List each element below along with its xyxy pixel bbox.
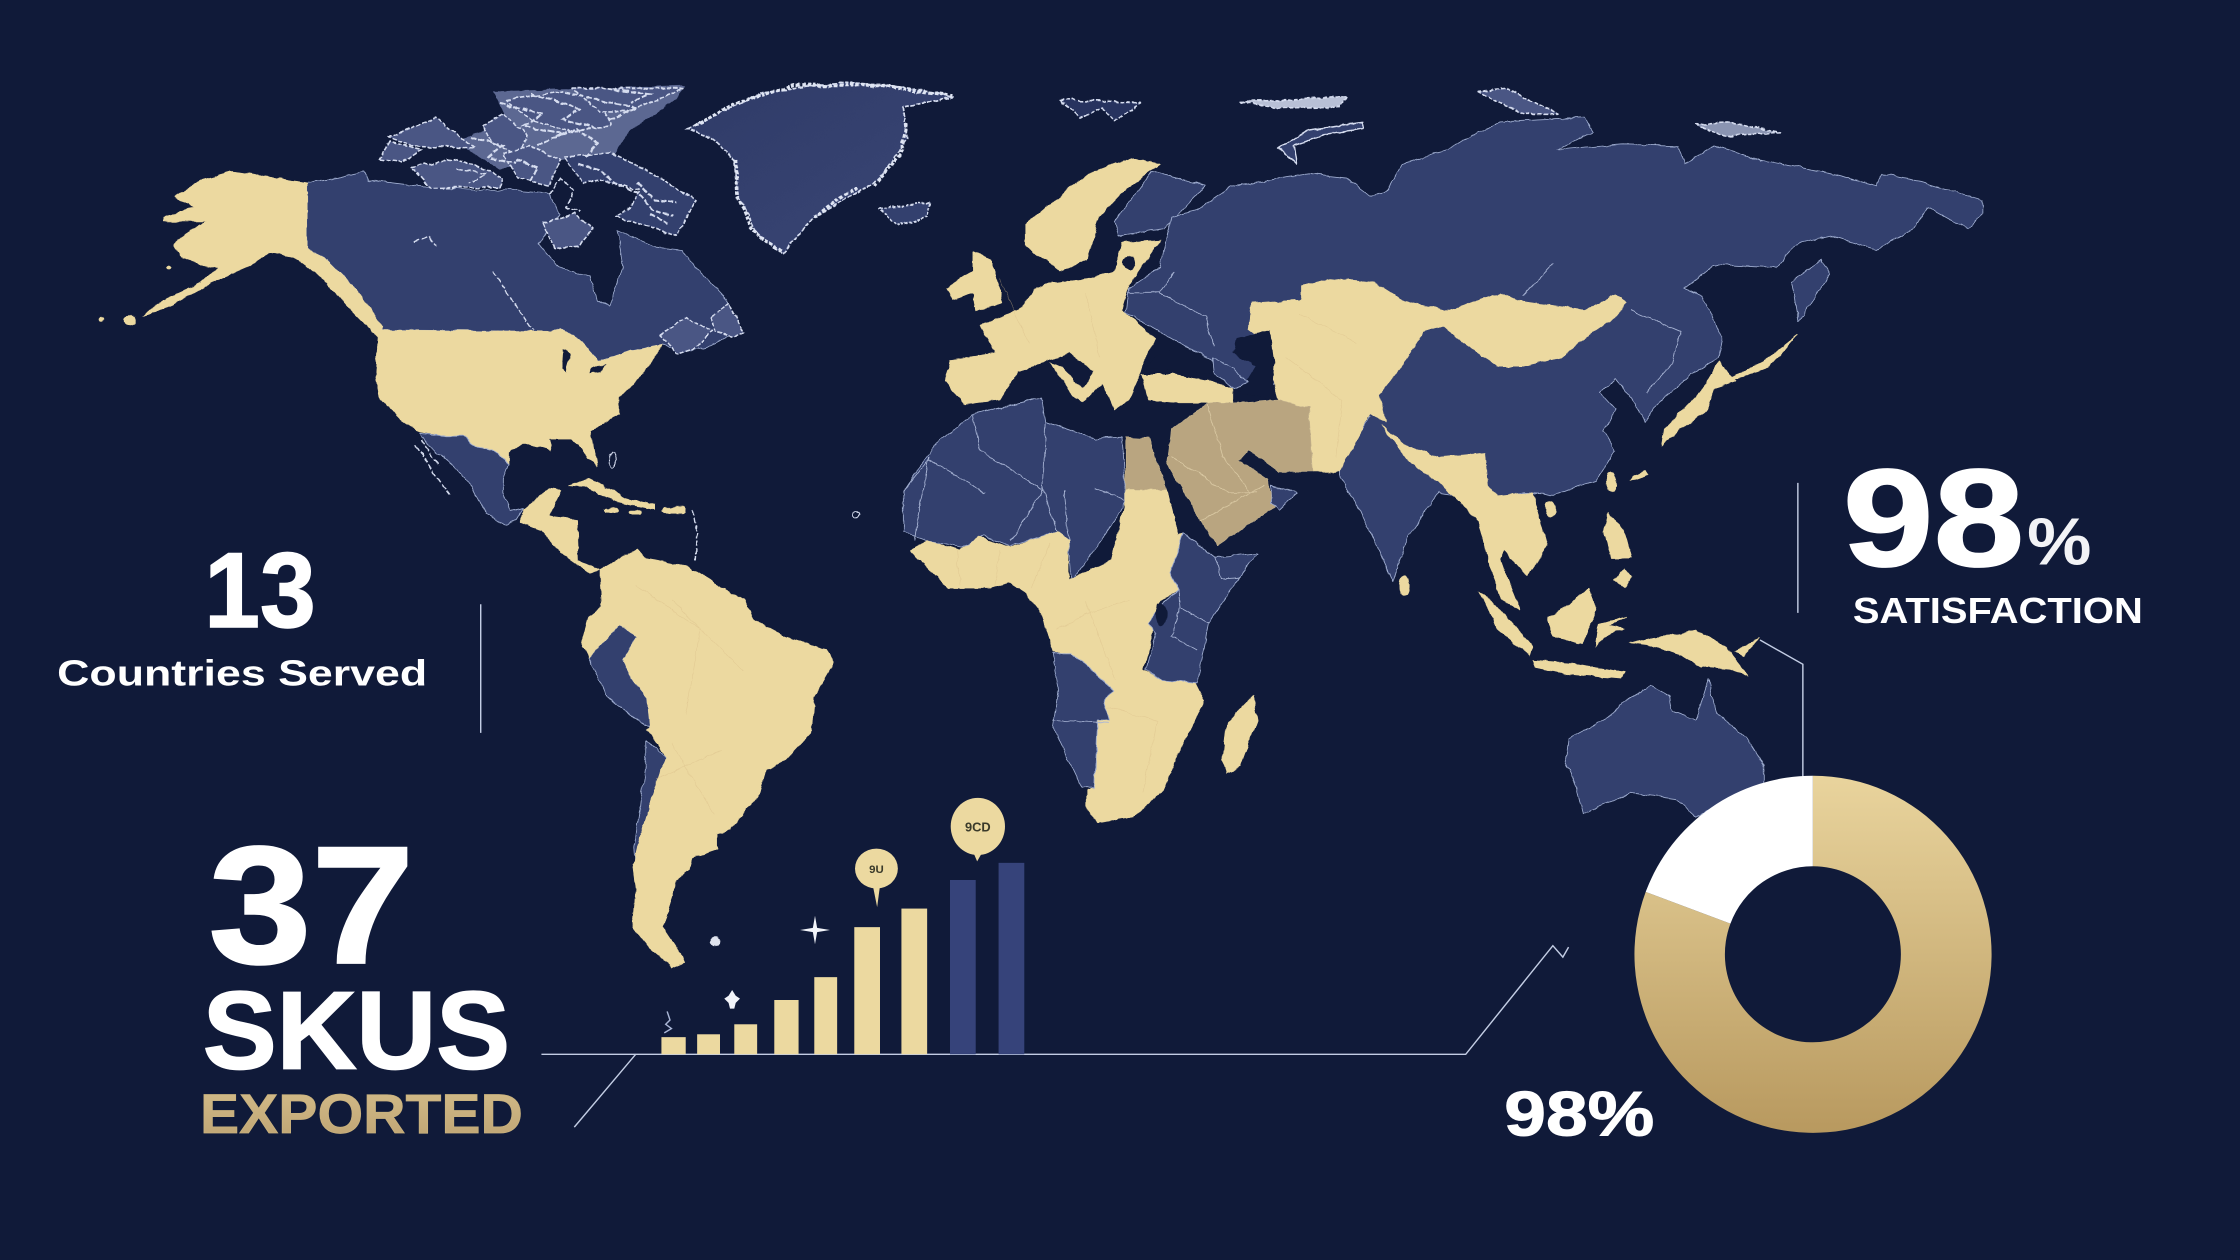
region: Southeast Asia xyxy=(1381,424,1547,610)
leader line to donut xyxy=(1760,640,1803,780)
baseline and connector lines xyxy=(541,946,1569,1054)
region: Arabian Peninsula xyxy=(1167,400,1313,546)
percent sign: % xyxy=(2027,504,2091,579)
Angola and Namibia border xyxy=(1053,720,1110,723)
region: Scandinavia xyxy=(1026,157,1160,271)
navy bars xyxy=(950,863,1024,1054)
Africa faint borders xyxy=(957,543,1157,793)
label: Countries Served xyxy=(57,654,427,694)
stat: 13 countries served xyxy=(57,530,481,733)
gold bars xyxy=(661,909,927,1054)
callout pin: large xyxy=(951,798,1005,861)
region: Central America xyxy=(520,489,600,573)
callout pin: small xyxy=(855,849,898,907)
region: New Siberian Islands xyxy=(1696,123,1780,136)
East Africa borders xyxy=(1171,557,1240,650)
region: Egypt xyxy=(1126,437,1167,490)
region: East Africa xyxy=(1146,533,1257,683)
icon: tiny figure xyxy=(664,1011,671,1033)
region: Chile xyxy=(634,740,666,867)
region: Europe xyxy=(946,240,1160,410)
region: United States xyxy=(376,327,661,467)
region: Canada xyxy=(307,171,740,361)
region: Alaska xyxy=(143,171,383,337)
divider xyxy=(480,604,482,733)
region: New Guinea xyxy=(1629,630,1749,676)
icon: Falkland islet xyxy=(709,936,719,947)
lower connector xyxy=(574,1054,636,1127)
white segment xyxy=(1646,776,1813,924)
value: 98 xyxy=(1843,442,2024,596)
callout pin: large: 9CD xyxy=(965,819,991,834)
region: North Africa xyxy=(903,397,1126,581)
callout pin: small: 9U xyxy=(869,864,884,876)
region: Indonesia xyxy=(1479,587,1627,679)
label: SATISFACTION xyxy=(1853,591,2143,631)
region: Central and West Africa xyxy=(910,490,1204,823)
region: South America xyxy=(581,549,834,967)
Greenland noisy coast xyxy=(694,86,951,251)
region: Central Asia and Mongolia xyxy=(1249,279,1627,471)
donut chart xyxy=(1634,776,1992,1133)
region: Oman xyxy=(1271,486,1297,510)
donut label: 98% xyxy=(1504,1080,1654,1150)
region: Severnaya Zemlya xyxy=(1477,89,1557,114)
Arabia borders xyxy=(1171,403,1264,521)
Lake Tanganyika xyxy=(1156,603,1167,626)
region: Angola and Namibia xyxy=(1053,653,1114,787)
region: UK xyxy=(946,251,1003,311)
gold segment xyxy=(1634,776,1992,1133)
icon: Aleutian islets xyxy=(99,265,171,326)
region: Peru xyxy=(589,624,650,727)
region: Svalbard xyxy=(1060,100,1140,121)
seas xyxy=(1121,256,1274,400)
lakes xyxy=(561,350,607,374)
region: Japan and Kuril arc xyxy=(1630,334,1799,481)
Asia inner borders xyxy=(1129,263,1680,393)
region: Arctic archipelago xyxy=(379,86,743,354)
South America faint borders xyxy=(636,586,743,814)
stat: 37 SKUs exported xyxy=(200,813,523,1145)
label: SKUS: SKUS xyxy=(203,970,510,1093)
region: Iceland xyxy=(880,203,930,226)
icon: sparkle xyxy=(800,916,830,944)
region: Hainan and Sri Lanka xyxy=(1399,471,1616,596)
Eurasia faint borders xyxy=(1000,279,1357,457)
icon: small star xyxy=(724,990,740,1009)
region: Australia xyxy=(1566,679,1764,817)
stat: 98% satisfaction xyxy=(1798,442,2143,631)
bar chart xyxy=(541,798,1569,1127)
region: Mexico xyxy=(419,433,523,524)
region: Caribbean islands xyxy=(569,451,859,561)
divider xyxy=(1797,483,1799,613)
region: Baja California xyxy=(416,440,450,496)
region: Novaya Zemlya xyxy=(1279,123,1363,164)
world map xyxy=(99,83,1983,967)
North Africa borders xyxy=(903,414,1126,540)
region: Franz Josef Land xyxy=(1240,96,1347,109)
region: Russia and China xyxy=(1126,117,1983,581)
value: 13 xyxy=(204,530,316,650)
region: Philippines xyxy=(1604,513,1631,587)
region: Finland xyxy=(1114,171,1206,236)
region: Georgia and Caucasus xyxy=(1213,357,1249,389)
label: EXPORTED: EXPORTED xyxy=(200,1083,523,1145)
value: 37 xyxy=(209,813,414,999)
region: Madagascar xyxy=(1223,696,1257,773)
region: Turkey xyxy=(1141,374,1233,403)
region: Greenland xyxy=(687,83,953,253)
region: Sakhalin xyxy=(1791,260,1830,321)
